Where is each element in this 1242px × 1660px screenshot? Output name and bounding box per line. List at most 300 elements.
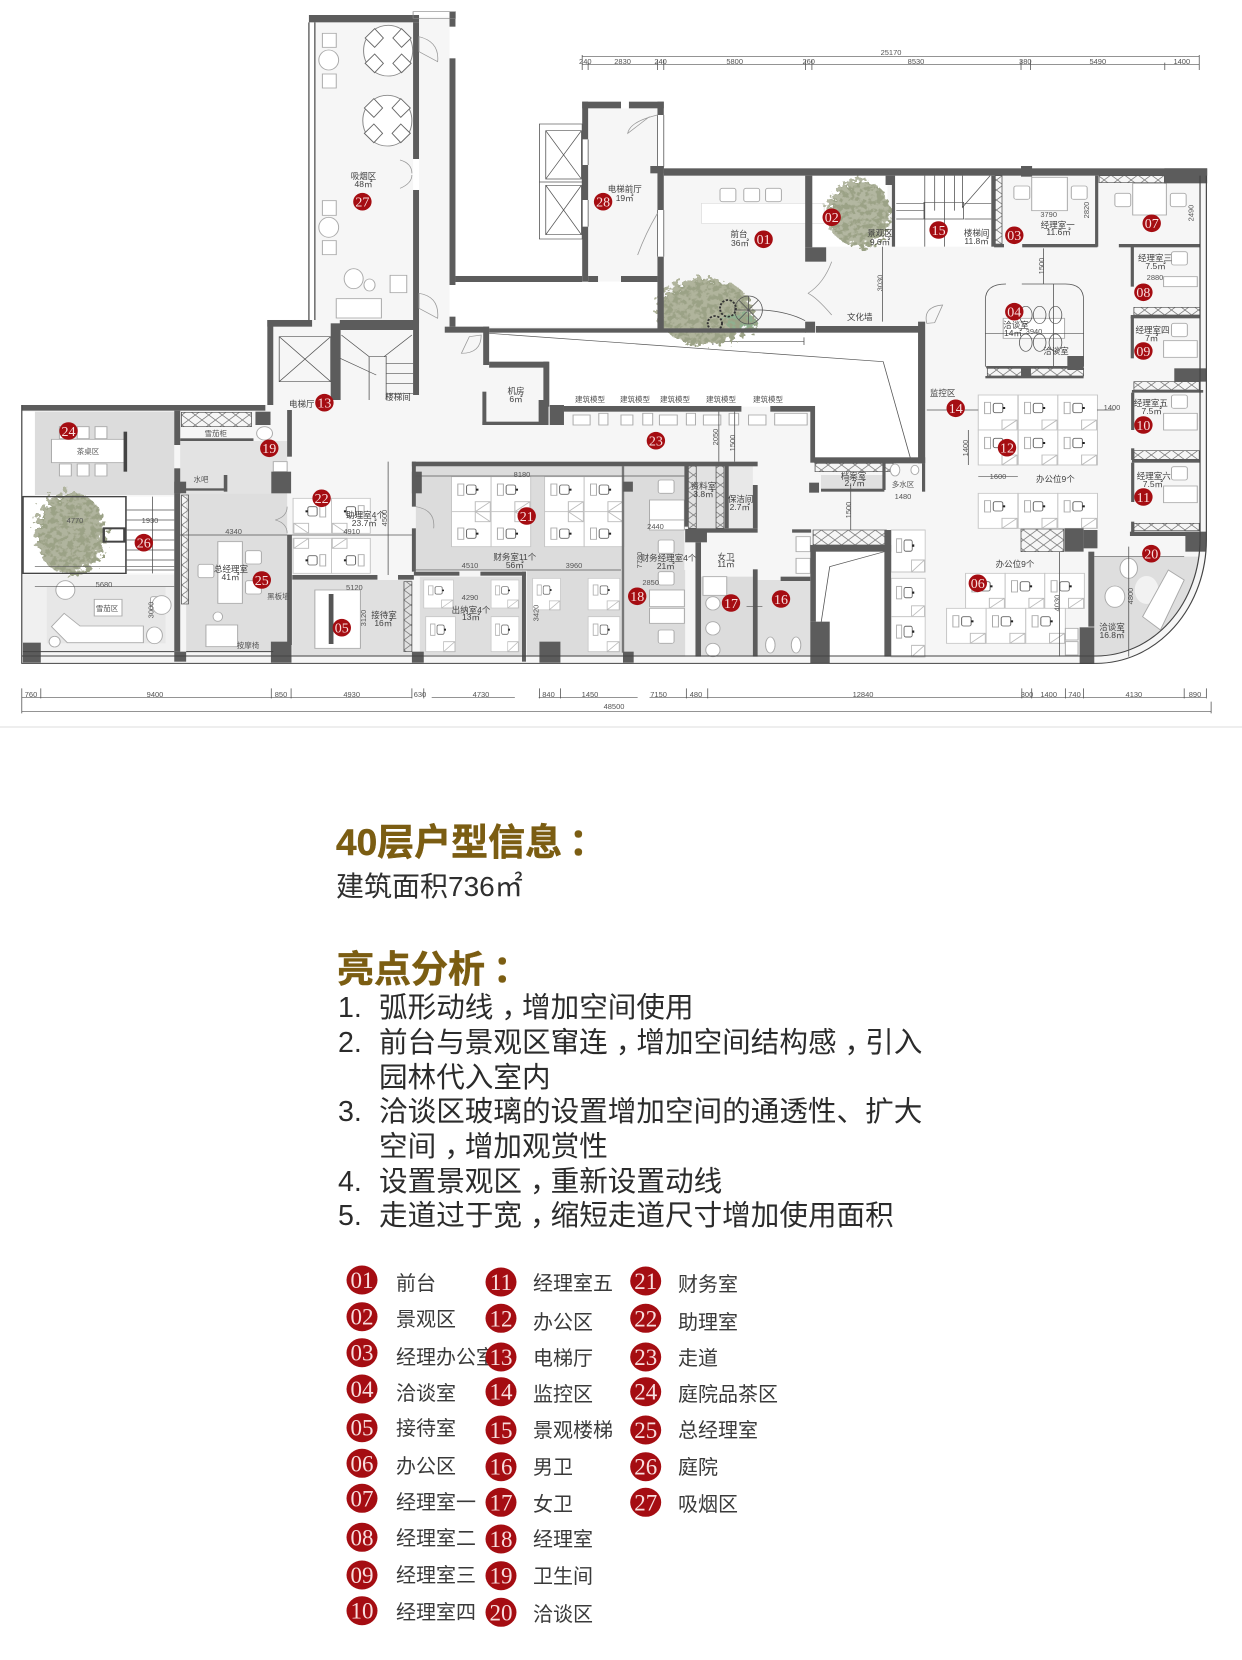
heading: highlight analysis: 亮点分析：: [337, 949, 530, 990]
legend 22: 22: [634, 1306, 657, 1331]
room labels: 经理室三: [1138, 253, 1172, 263]
marker 25: 25: [255, 574, 269, 589]
dimension numbers: 2440: [647, 522, 664, 531]
room labels: 16.8㎡: [1099, 630, 1125, 640]
legend 16: 男卫: [533, 1457, 573, 1479]
legend 18: 18: [490, 1527, 512, 1552]
room labels: 办公位9个: [1036, 474, 1075, 484]
numbered list: highlights: 园林代入室内: [379, 1062, 551, 1094]
room labels: 按摩椅: [237, 640, 260, 650]
dimension numbers: 1400: [1040, 690, 1057, 699]
room labels: 2.7㎡: [730, 502, 750, 512]
room labels: 9.6㎡: [870, 237, 891, 247]
marker 26: [135, 534, 153, 552]
conference and reception details: [489, 284, 1084, 657]
legend 06: 06: [350, 1451, 374, 1476]
marker 04: 04: [1007, 306, 1021, 320]
panel: floor plan: [22, 12, 1211, 713]
legend 21: [630, 1266, 738, 1296]
dimension numbers: 4770: [67, 516, 83, 525]
marker 15: [929, 221, 948, 239]
room labels: 保洁间: [728, 494, 753, 504]
legend 07: [346, 1484, 476, 1514]
legend 04: 洽谈室: [396, 1382, 456, 1405]
marker 01: [754, 230, 773, 248]
marker 08: [1134, 284, 1153, 301]
legend 08: 经理室二: [396, 1527, 476, 1550]
legend 17: [486, 1488, 573, 1517]
legend 27: [630, 1488, 738, 1517]
room labels: 7.5㎡: [1145, 261, 1166, 271]
legend 26: 庭院: [678, 1456, 718, 1479]
dimension numbers: 840: [542, 690, 555, 699]
dimension numbers: 7150: [650, 690, 667, 699]
room labels: 洽谈室: [1099, 622, 1125, 632]
dimension numbers: 5120: [346, 583, 363, 592]
room labels: 多水区: [892, 479, 915, 489]
room labels: 建筑模型: [660, 394, 690, 404]
dimension numbers: 4910: [343, 527, 360, 536]
room labels: 6㎡: [509, 394, 523, 404]
room labels: 16㎡: [374, 618, 393, 628]
legend 23: [630, 1342, 718, 1372]
room labels: 资料室: [691, 481, 717, 491]
room labels: 洽谈室: [1043, 346, 1069, 356]
room labels: 11㎡: [717, 559, 735, 569]
room labels: 雪茄区: [96, 603, 119, 613]
marker 02: [822, 208, 841, 226]
room labels: 23.7㎡: [352, 518, 377, 528]
numbered list: highlights: 前台与景观区窜连 ，增加空间结构感 ，引入: [379, 1027, 922, 1059]
room labels: 接待室: [371, 610, 397, 620]
dimension numbers: 4930: [343, 690, 360, 699]
legend 19: [486, 1561, 593, 1590]
legend 03: 经理办公室: [396, 1346, 496, 1369]
room labels: 14㎡: [1004, 328, 1022, 338]
legend 13: 13: [490, 1345, 512, 1370]
legend 05: 接待室: [396, 1417, 456, 1440]
legend 27: 吸烟区: [678, 1493, 738, 1516]
room labels: 女卫: [717, 552, 735, 562]
legend 22: 助理室: [678, 1311, 738, 1334]
dimension numbers: 300: [1021, 690, 1033, 699]
walls: [22, 12, 1207, 664]
marker 16: [772, 590, 790, 608]
marker 03: [1005, 226, 1024, 244]
legend 03: [346, 1338, 496, 1369]
meeting area 20 furniture: [1065, 558, 1184, 655]
marker 05: [333, 619, 351, 636]
room labels: 48㎡: [355, 179, 373, 189]
legend 19: 19: [490, 1564, 512, 1589]
marker 06: [969, 574, 987, 592]
legend 24: 24: [634, 1380, 658, 1405]
room labels: [77, 171, 1172, 650]
legend 09: 09: [350, 1563, 374, 1588]
room labels: 办公位9个: [996, 559, 1035, 569]
room labels: 景观区: [867, 228, 893, 238]
room number markers: [59, 193, 1161, 636]
dimension numbers: 4340: [225, 527, 242, 536]
room labels: 7㎡: [1145, 333, 1159, 343]
legend 26: 26: [634, 1455, 657, 1480]
dimension numbers: 7780: [635, 552, 644, 568]
legend 20: [486, 1598, 593, 1627]
legend 14: [486, 1377, 593, 1406]
dimension numbers: 25170: [881, 48, 901, 57]
room labels: 总经理室: [214, 564, 248, 574]
plan drawing: [22, 12, 1211, 713]
legend 10: 10: [350, 1599, 374, 1624]
dimension numbers: 5490: [1089, 57, 1106, 66]
marker 27: [353, 193, 372, 210]
numbered list: highlights: 1.: [338, 992, 362, 1024]
legend 02: [346, 1302, 456, 1331]
legend: [346, 1266, 778, 1627]
dimension numbers: 48500: [604, 702, 624, 711]
room labels: 41㎡: [222, 572, 240, 582]
dimension numbers: 740: [1068, 690, 1081, 699]
marker 23: [647, 432, 665, 450]
room labels: 11.6㎡: [1046, 227, 1071, 237]
marker 28: [594, 193, 612, 210]
room labels: 助理室4个: [346, 510, 385, 520]
dimension numbers: 3940: [1026, 327, 1042, 336]
dimension numbers: 8530: [908, 57, 924, 66]
dimension numbers: 630: [414, 690, 426, 699]
legend 17: 女卫: [533, 1493, 573, 1516]
marker 22: [312, 490, 331, 507]
dimension numbers: 240: [654, 57, 667, 66]
marker 26: 26: [137, 536, 151, 552]
room labels: 监控区: [930, 388, 956, 398]
marker 27: 27: [355, 196, 369, 210]
legend 23: 23: [634, 1345, 657, 1370]
heading: floor information: 40层户型信息：: [336, 822, 606, 863]
marker 25: [253, 571, 271, 589]
legend 15: [486, 1416, 613, 1444]
marker 03: 03: [1007, 229, 1021, 244]
legend 14: 14: [490, 1380, 513, 1405]
marker 10: 10: [1136, 419, 1150, 434]
marker 18: [628, 588, 646, 605]
marker 05: 05: [335, 622, 349, 636]
legend 01: 01: [350, 1268, 374, 1293]
legend 09: [346, 1560, 476, 1590]
chairs: [150, 186, 1187, 643]
legend 16: [486, 1452, 573, 1481]
legend 12: 办公区: [533, 1311, 593, 1334]
room labels: 文化墙: [847, 312, 873, 322]
legend 02: 02: [350, 1305, 374, 1330]
room labels: 建筑模型: [620, 394, 650, 404]
dimension numbers: 4500: [380, 510, 389, 526]
dimension numbers: 1480: [895, 492, 911, 501]
room labels: 经理室五: [1134, 398, 1168, 408]
dimension numbers: 4730: [473, 690, 489, 699]
legend 13: [486, 1342, 593, 1372]
legend 14: 监控区: [533, 1383, 593, 1406]
marker 20: [1142, 545, 1161, 562]
legend 08: 08: [350, 1525, 374, 1550]
marker 19: [260, 440, 278, 457]
numbered list: highlights: [338, 992, 922, 1232]
legend 09: 经理室三: [396, 1564, 476, 1587]
dimension numbers: [25, 48, 1201, 711]
toilet fixtures: [257, 427, 919, 657]
dimension numbers: 480: [690, 690, 702, 699]
landscape wheel detail: [708, 296, 805, 331]
marker 07: 07: [1145, 217, 1159, 232]
building model displays: [573, 413, 807, 425]
dimension numbers: 2820: [1082, 202, 1091, 218]
legend 02: 景观区: [396, 1309, 456, 1331]
legend 06: [346, 1449, 456, 1478]
manager desks: [218, 177, 1197, 648]
dimension numbers: 3000: [146, 602, 156, 618]
legend 25: 总经理室: [678, 1419, 758, 1442]
legend 11: 11: [490, 1270, 512, 1295]
marker 14: 14: [949, 402, 963, 417]
dimension numbers: 4800: [1126, 588, 1135, 604]
room labels: 11.8㎡: [964, 236, 989, 246]
legend 13: 电梯厅: [533, 1347, 593, 1370]
room labels: 黑板墙: [267, 591, 290, 601]
legend 12: 12: [490, 1306, 512, 1331]
numbered list: highlights: 2.: [338, 1027, 362, 1059]
room labels: 7.5㎡: [1142, 406, 1162, 416]
marker 11: [1134, 488, 1153, 506]
legend 04: [346, 1374, 456, 1405]
room labels: 建筑模型: [575, 394, 605, 404]
dimension numbers: 1600: [990, 472, 1006, 481]
legend 11: [486, 1268, 613, 1296]
legend 11: 经理室五: [533, 1272, 613, 1295]
legend 22: [630, 1304, 738, 1334]
dimension numbers: 1400: [1173, 57, 1190, 66]
marker 22: 22: [315, 492, 329, 507]
dimension numbers: 5800: [726, 57, 743, 66]
room labels: 经理室四: [1135, 325, 1170, 335]
dimension numbers: 3030: [876, 275, 885, 291]
marker 17: 17: [724, 597, 738, 612]
marker 07: [1142, 214, 1161, 232]
legend 23: 走道: [678, 1347, 718, 1370]
dimension numbers: 260: [802, 57, 815, 66]
dimension numbers: 9400: [147, 690, 163, 699]
marker 09: [1134, 342, 1153, 360]
room labels: 雪茄柜: [205, 428, 228, 438]
marker 24: 24: [62, 425, 76, 440]
marker 13: [315, 394, 334, 412]
legend 25: [630, 1416, 758, 1444]
dimension numbers: 2050: [711, 429, 720, 445]
dimension numbers: 3420: [531, 605, 540, 621]
legend 20: 20: [490, 1600, 512, 1625]
legend 12: [486, 1304, 593, 1334]
floor base: [22, 17, 1206, 663]
marker 19: 19: [262, 442, 276, 457]
dimension numbers: 1930: [142, 516, 158, 525]
numbered list: highlights: 弧形动线 ，增加空间使用: [379, 992, 694, 1024]
marker 24: [59, 422, 78, 440]
room labels: 前台: [730, 229, 748, 239]
marker 08: 08: [1136, 286, 1150, 301]
room labels: 水吧: [194, 474, 209, 484]
dimension numbers: 1500: [728, 435, 737, 451]
dimension numbers: 12840: [853, 690, 873, 699]
dimension numbers: 3790: [1040, 210, 1057, 219]
room labels: 财务室11个: [493, 552, 537, 562]
marker 15: 15: [932, 224, 946, 239]
room labels: 21㎡: [657, 561, 675, 571]
marker 04: [1005, 303, 1024, 321]
room labels: 电梯厅: [289, 399, 315, 409]
room labels: 建筑模型: [706, 394, 736, 404]
dimension numbers: 1500: [844, 502, 853, 518]
doors: [275, 37, 943, 533]
room labels: 机房: [507, 386, 525, 396]
dimension numbers: 760: [25, 690, 37, 699]
legend 27: 27: [634, 1490, 657, 1515]
marker 09: 09: [1136, 345, 1150, 360]
marker 17: [722, 594, 740, 612]
room labels: 档案室: [841, 471, 867, 481]
elevators and stairs: [127, 115, 991, 570]
dimension numbers: 2490: [1186, 205, 1196, 221]
room labels: 吸烟区: [351, 171, 377, 181]
legend 19: 卫生间: [533, 1565, 593, 1588]
marker 13: 13: [317, 396, 331, 412]
marker 12: [998, 439, 1016, 457]
marker 18: 18: [630, 590, 644, 605]
smoking area furniture: [319, 25, 413, 318]
marker 21: 21: [520, 510, 534, 525]
marker 16: 16: [774, 593, 788, 608]
numbered list: highlights: 3.: [338, 1096, 362, 1128]
legend 15: 15: [490, 1418, 512, 1443]
workstations: [293, 395, 1097, 657]
room fills: [23, 176, 1200, 657]
numbered list: highlights: 走道过于宽 ，缩短走道尺寸增加使用面积: [379, 1200, 894, 1232]
dimension numbers: 2830: [614, 57, 631, 66]
legend 06: 办公区: [396, 1455, 456, 1478]
dimension numbers: 3120: [359, 610, 368, 626]
room labels: 经理室六: [1137, 471, 1171, 481]
legend 05: 05: [350, 1416, 374, 1441]
dimension numbers: 2850: [642, 578, 659, 587]
numbered list: highlights: 洽谈区玻璃的设置增加空间的通透性、扩大: [379, 1096, 922, 1128]
legend 08: [346, 1523, 476, 1552]
room labels: 楼梯间: [964, 228, 989, 238]
tea table and terrace furniture: [49, 427, 333, 647]
numbered list: highlights: 4.: [338, 1166, 362, 1198]
marker 10: [1134, 416, 1153, 434]
room labels: 茶桌区: [77, 446, 100, 456]
room labels: 楼梯间: [385, 392, 411, 402]
room labels: 7.5㎡: [1143, 479, 1164, 489]
dimension numbers: 240: [579, 57, 592, 66]
room labels: 建筑模型: [753, 394, 783, 404]
legend 07: 07: [350, 1486, 374, 1511]
dimension numbers: 1450: [582, 690, 598, 699]
numbered list: highlights: 5.: [338, 1200, 362, 1232]
marker 14: [946, 400, 965, 417]
numbered list: highlights: 空间 ，增加观赏性: [379, 1131, 608, 1163]
dimension lines: [22, 55, 1211, 713]
dimension numbers: 2880: [1147, 273, 1163, 282]
dimension numbers: 850: [275, 690, 287, 699]
legend 25: 25: [634, 1418, 657, 1443]
room labels: 56㎡: [506, 560, 524, 570]
dimension numbers: 890: [1189, 690, 1201, 699]
legend 17: 17: [490, 1490, 512, 1515]
marker 28: 28: [596, 196, 610, 210]
marker 01: 01: [757, 233, 771, 248]
legend 18: [486, 1524, 593, 1554]
room labels: 出纳室4个: [452, 605, 491, 615]
dimension numbers: 3960: [566, 561, 582, 570]
room labels: 经理室一: [1041, 220, 1075, 230]
dimension numbers: 4030: [1053, 595, 1062, 611]
marker 23: 23: [649, 434, 663, 450]
legend 24: 庭院品茶区: [678, 1383, 778, 1406]
marker 02: 02: [825, 211, 839, 226]
room labels: 36㎡: [731, 238, 749, 248]
room labels: 电梯前厅: [608, 184, 642, 194]
outer thin lines and curved facade: [22, 12, 1206, 663]
marker 20: 20: [1144, 548, 1158, 562]
legend 20: 洽谈区: [533, 1603, 593, 1626]
legend 01: [346, 1266, 436, 1295]
marker 21: [518, 507, 536, 525]
room labels: 洽谈室: [1003, 320, 1029, 330]
legend 18: 经理室: [533, 1528, 593, 1551]
legend 07: 经理室一: [396, 1491, 476, 1514]
open air void: [489, 333, 918, 457]
room labels: 3.8㎡: [693, 489, 714, 499]
dimension numbers: 4130: [1126, 690, 1142, 699]
legend 01: 前台: [396, 1272, 436, 1295]
dimension numbers: 1400: [961, 440, 970, 456]
legend 15: 景观楼梯: [533, 1419, 613, 1442]
legend 10: [346, 1596, 476, 1625]
dimension numbers: 1500: [1037, 258, 1046, 274]
room labels: 财务经理室4个: [641, 553, 697, 563]
dimension numbers: 4510: [462, 561, 478, 570]
room labels: 13㎡: [462, 612, 480, 622]
legend 16: 16: [490, 1455, 512, 1480]
legend 10: 经理室四: [396, 1601, 476, 1624]
dimension numbers: 8180: [514, 470, 530, 479]
legend 26: [630, 1452, 718, 1481]
cabinets: [181, 176, 1200, 652]
marker 06: 06: [971, 577, 985, 592]
legend 03: 03: [350, 1341, 374, 1366]
dimension numbers: 4290: [462, 593, 478, 602]
legend 05: [346, 1413, 456, 1442]
plants: [36, 180, 891, 575]
room labels: 19㎡: [616, 193, 634, 203]
legend 21: 21: [634, 1269, 657, 1294]
marker 11: 11: [1137, 491, 1150, 506]
numbered list: highlights: 设置景观区 ，重新设置动线: [379, 1166, 722, 1198]
legend 04: 04: [350, 1377, 374, 1402]
marker 12: 12: [1000, 442, 1014, 456]
dimension numbers: 380: [1019, 57, 1032, 66]
room labels: 2.7㎡: [845, 478, 865, 488]
dimension numbers: 5680: [96, 580, 112, 589]
